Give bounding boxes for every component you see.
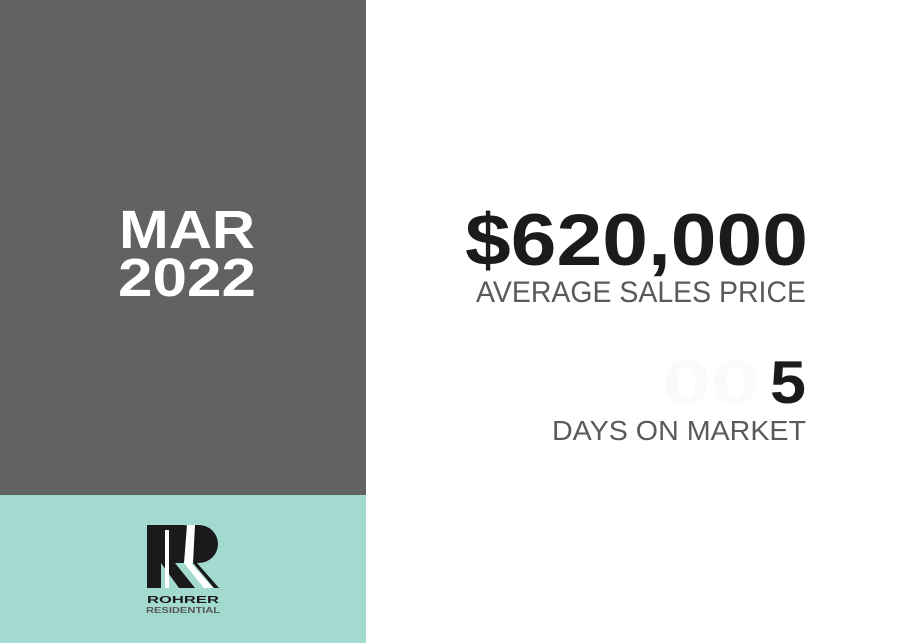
icon: RR logo	[146, 525, 220, 615]
text: logo name: ROHRER	[147, 595, 220, 606]
stat: days on market: 5	[770, 349, 806, 416]
stat: days on market: DAYS ON MARKET	[552, 415, 806, 446]
icon: RR logo: RESIDENTIAL	[146, 606, 220, 615]
stat: average sales price: AVERAGE SALES PRICE	[476, 276, 806, 309]
stat: days on market: 00	[662, 349, 760, 416]
heading: month and year: MAR	[119, 200, 255, 260]
stat: average sales price	[465, 200, 808, 309]
heading: month and year	[118, 200, 256, 308]
panel: logo panel	[0, 495, 366, 643]
stat: days on market	[552, 349, 806, 446]
panel: date panel	[0, 0, 366, 495]
heading: month and year: 2022	[118, 248, 256, 308]
stat: average sales price: $620,000	[465, 200, 808, 281]
